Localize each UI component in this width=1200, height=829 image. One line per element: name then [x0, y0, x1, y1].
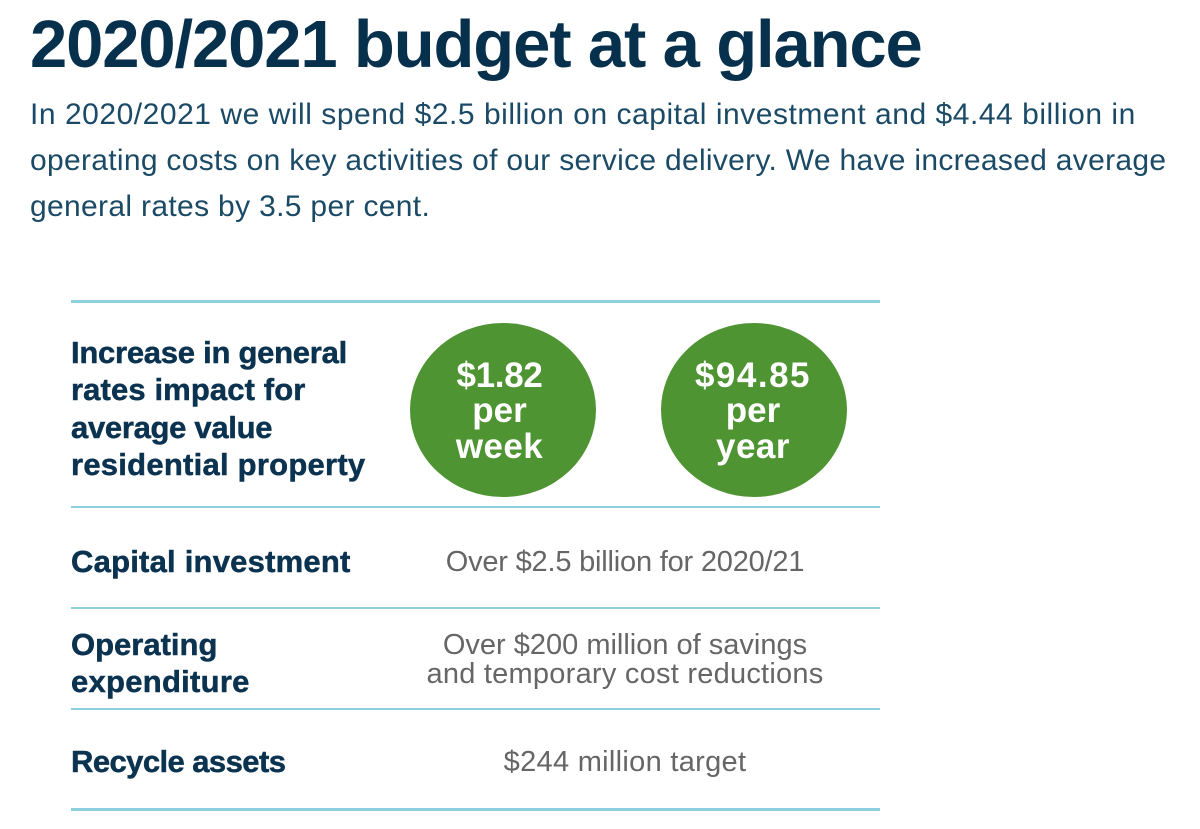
row heading: rates impact: residential property — [71, 447, 365, 482]
intro paragraph — [30, 98, 1166, 223]
budget table — [71, 300, 880, 811]
capital investment value: Over $2.5 billion for 2020/21 — [446, 546, 804, 578]
circle: per week: per — [472, 391, 527, 430]
circle: per year: year — [716, 426, 790, 466]
operating expenditure value: Over $200 million of savings — [443, 629, 807, 661]
circle: per week: week — [456, 426, 543, 466]
recycle assets value: $244 million target — [504, 746, 746, 778]
title: 2020/2021 budget at a glance — [30, 7, 922, 82]
circle: per week — [410, 323, 596, 497]
operating expenditure value: and temporary cost reductions — [426, 658, 824, 690]
intro paragraph: In 2020/2021 we will spend $2.5 billion on capital investment and $4.44 billion in — [30, 98, 1136, 131]
intro paragraph: operating costs on key activities of our service delivery. We have increased average — [30, 144, 1166, 177]
row heading: rates impact: Increase in general — [71, 334, 347, 370]
row heading: rates impact: rates impact for — [71, 372, 306, 407]
operating expenditure value — [426, 629, 824, 690]
row heading: operating expenditure: expenditure — [71, 664, 250, 699]
circle: per year: per — [726, 391, 780, 430]
circle: per year — [661, 323, 847, 497]
circle: per year: $94.85 — [695, 356, 811, 394]
row heading: recycle assets: Recycle assets — [71, 744, 285, 779]
row heading: capital investment: Capital investment — [71, 544, 351, 579]
circle: per week: $1.82 — [456, 356, 543, 394]
row heading: operating expenditure: Operating — [71, 626, 217, 662]
intro paragraph: general rates by 3.5 per cent. — [30, 190, 430, 223]
row heading: rates impact — [71, 334, 366, 482]
row heading: operating expenditure — [71, 626, 250, 699]
row heading: rates impact: average value — [71, 410, 272, 444]
